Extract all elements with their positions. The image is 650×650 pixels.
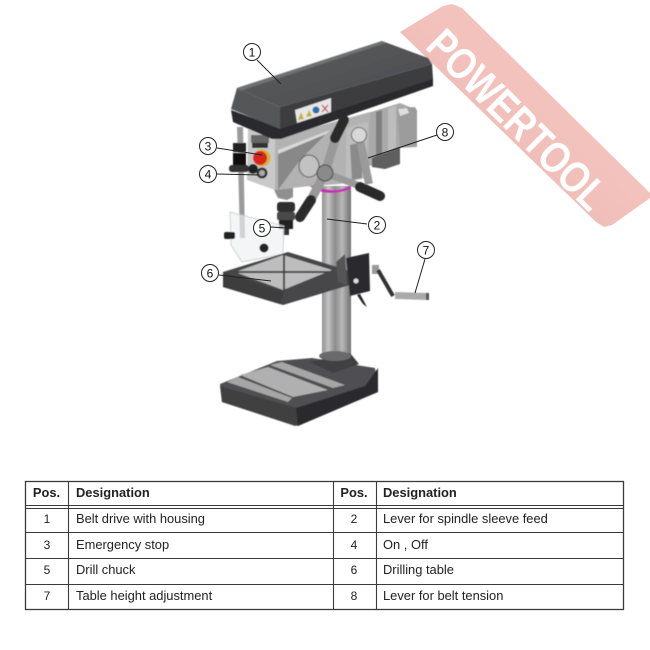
callout 5	[254, 220, 270, 236]
column base flange	[310, 351, 359, 373]
callout 1	[244, 44, 260, 60]
callout 8: 8	[442, 126, 449, 140]
callout 1: 1	[249, 46, 256, 60]
table rows: 4	[351, 538, 358, 552]
head cover	[231, 41, 433, 139]
table rows: 8	[351, 589, 358, 603]
table rows: Lever for belt tension	[383, 588, 503, 603]
callout 5: 5	[259, 222, 266, 236]
callout 4: 4	[205, 168, 212, 182]
table rows: 6	[351, 563, 358, 577]
lever for spindle sleeve feed	[299, 120, 380, 217]
table rows: Belt drive with housing	[76, 511, 205, 526]
magenta collar	[309, 182, 351, 193]
rod clamp	[229, 143, 249, 172]
leader lines	[217, 60, 437, 293]
parts table	[25, 481, 624, 610]
table header: Designation	[383, 485, 457, 500]
table rows: 1	[44, 512, 51, 526]
table header: Designation	[76, 485, 150, 500]
table rows: 7	[44, 589, 51, 603]
lever for belt tension	[352, 128, 369, 184]
callout 6: 6	[207, 266, 214, 280]
table rows: 5	[44, 563, 51, 577]
guard support rod	[237, 127, 245, 238]
table clamp	[336, 253, 370, 307]
callout 8	[436, 124, 454, 140]
drill press illustration	[220, 41, 433, 426]
on off knobs	[248, 164, 268, 178]
table rows: Drill chuck	[76, 562, 136, 577]
table height crank	[372, 265, 429, 300]
table rows: Emergency stop	[76, 537, 169, 552]
callout 7: 7	[423, 244, 430, 258]
callout 4	[200, 166, 216, 182]
machine body	[275, 112, 370, 190]
control panel	[247, 128, 275, 190]
transparent chuck guard	[224, 212, 284, 262]
table header: Pos.	[340, 485, 368, 500]
table rows: Lever for spindle sleeve feed	[383, 511, 548, 526]
callout 6	[202, 264, 218, 282]
table rows: 2	[351, 512, 358, 526]
drilling table	[223, 252, 350, 305]
callout 2	[368, 216, 386, 234]
table header	[33, 485, 457, 500]
safety labels	[295, 98, 331, 123]
callout 7	[418, 242, 434, 258]
callout 2: 2	[374, 218, 381, 232]
base	[220, 358, 378, 426]
table rows: 3	[44, 538, 51, 552]
column	[322, 186, 351, 358]
table rows: Table height adjustment	[76, 588, 213, 603]
table header: Pos.	[33, 485, 60, 500]
watermark: POWERTOOL: POWERTOOL	[417, 20, 617, 220]
motor	[368, 103, 417, 169]
table rows: Drilling table	[383, 562, 454, 577]
callout 3	[200, 138, 216, 154]
emergency stop button	[253, 150, 270, 166]
spindle and drill chuck	[274, 188, 295, 235]
callout 3: 3	[205, 140, 212, 154]
table rows	[44, 511, 548, 603]
table rows: On , Off	[383, 537, 428, 552]
